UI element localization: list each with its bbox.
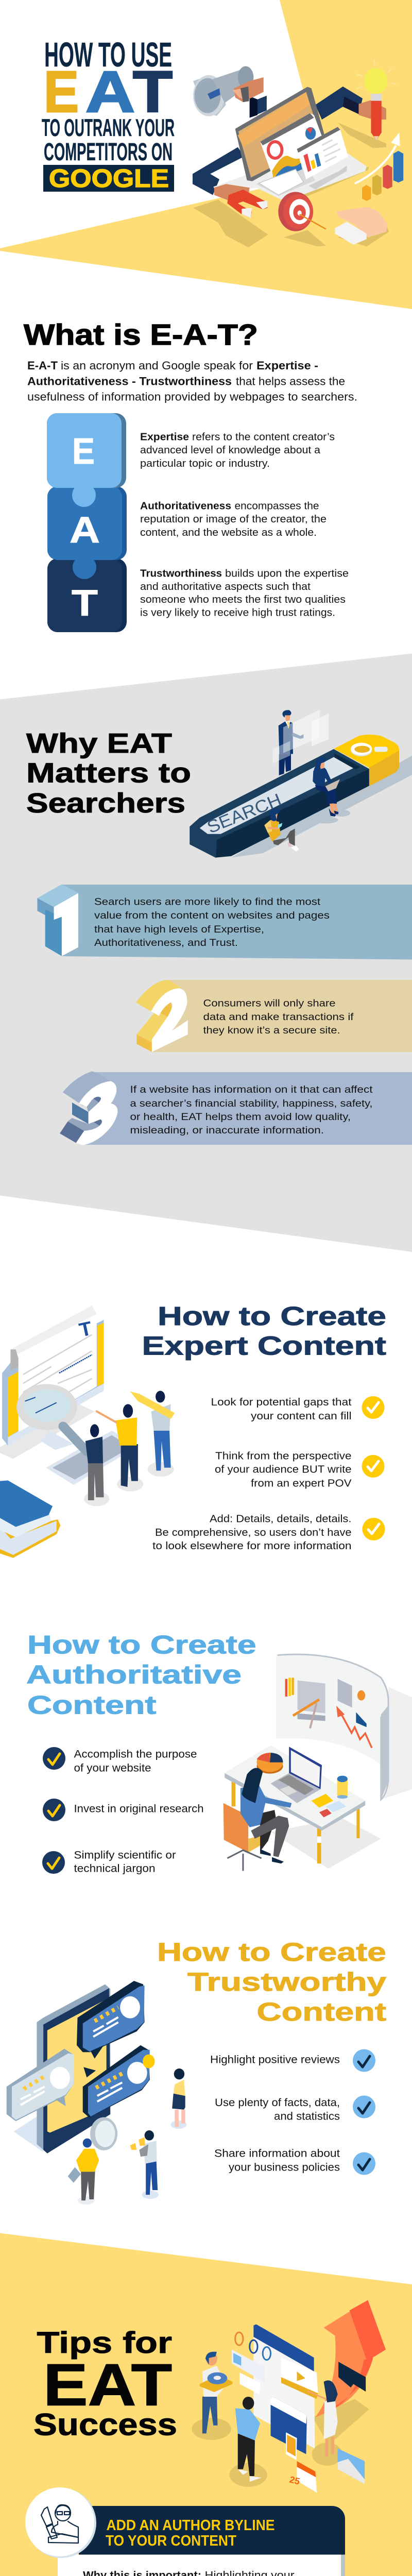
text: Trustworthiness xyxy=(140,568,349,618)
text: Authoritativeness xyxy=(140,501,327,538)
intro paragraph: that helps assess the xyxy=(236,375,345,387)
title xyxy=(42,36,175,193)
list: authoritative content tips xyxy=(74,1749,204,1874)
heading: How to Create Expert Content xyxy=(142,1301,386,1360)
list: expert content tips: from an expert POV xyxy=(251,1478,352,1489)
text: reason 2: data and make transactions if xyxy=(203,1012,354,1023)
panel: why EAT matters background xyxy=(0,653,412,1252)
text: Trustworthiness: someone who meets the first two qualities xyxy=(140,594,346,605)
intro paragraph: Authoritativeness - Trustworthiness xyxy=(27,375,232,387)
text: Trustworthiness: is very likely to receive high trust ratings. xyxy=(140,607,335,618)
heading: How to Create Authoritative Content: Authoritative xyxy=(26,1660,242,1689)
label: calendar date: 25 xyxy=(288,2474,301,2487)
list: trustworthy content tips: and statistics xyxy=(274,2110,340,2123)
text: Expertise: particular topic or industry. xyxy=(140,458,270,469)
illustration: search bar with people xyxy=(190,709,412,858)
text: reason 3: or health, EAT helps them avoid low quality, xyxy=(130,1112,351,1123)
list: expert content tips: your content can fill xyxy=(251,1411,351,1422)
text: reason 1: that have high levels of Expertise, xyxy=(94,924,264,935)
text: Trustworthiness: Trustworthiness xyxy=(140,568,222,579)
illustration: search bar with people: SEARCH xyxy=(204,790,284,837)
heading: How to Create Trustworthy Content: How to Create xyxy=(157,1938,386,1967)
icon: author with pen xyxy=(25,2487,96,2558)
heading: Why EAT Matters to Searchers: Searchers xyxy=(26,788,185,819)
intro paragraph: E-A-T xyxy=(27,359,58,372)
list: trustworthy content tips: Use plenty of facts, data, xyxy=(215,2097,340,2109)
heading: Why EAT Matters to Searchers: Matters to xyxy=(26,757,191,788)
heading: Why EAT Matters to Searchers xyxy=(26,728,191,819)
icon: number 2 xyxy=(136,980,188,1052)
illustration: monitor, magnifier and team xyxy=(0,1306,175,1558)
heading: How to Create Expert Content: Expert Content xyxy=(142,1331,386,1360)
text: reason 1 xyxy=(94,896,330,948)
list: authoritative content tips: technical jargon xyxy=(74,1863,156,1874)
icons: navy check marks xyxy=(42,1747,65,1874)
text: Trustworthiness: builds upon the expertise xyxy=(225,568,349,579)
heading: Why EAT Matters to Searchers: Why EAT xyxy=(26,728,172,759)
list: trustworthy content tips: your business policies xyxy=(229,2162,340,2173)
text: Authoritativeness: content, and the website as a whole. xyxy=(140,527,317,538)
panel: reason 1 xyxy=(37,884,412,959)
heading: What is E-A-T?: What is E-A-T? xyxy=(24,318,258,351)
card: add an author byline: TO YOUR CONTENT xyxy=(106,2533,236,2549)
list: expert content tips: Think from the perspective xyxy=(215,1451,351,1462)
E-A-T puzzle blocks xyxy=(47,413,127,632)
icon: number 3 xyxy=(60,1071,117,1145)
intro paragraph: Expertise - xyxy=(256,359,318,372)
text: reason 1: Authoritativeness, and Trust. xyxy=(94,938,238,948)
title: T xyxy=(133,59,173,124)
icon: number 1 xyxy=(37,884,78,956)
intro paragraph xyxy=(27,359,357,403)
title: E xyxy=(44,59,79,124)
heading: Tips for EAT Success: Tips for xyxy=(37,2326,172,2360)
title: TO OUTRANK YOUR xyxy=(42,114,175,141)
illustration: woman at desk with charts xyxy=(224,1654,412,1871)
list: authoritative content tips: Simplify scientific or xyxy=(74,1850,176,1861)
illustration: team building a web page with rising arrow xyxy=(192,2300,386,2493)
heading: How to Create Authoritative Content: Content xyxy=(27,1691,157,1720)
text: Expertise: refers to the content creator’s xyxy=(192,432,335,443)
text: Expertise: advanced level of knowledge about a xyxy=(140,445,321,456)
panel: reason 2 xyxy=(136,980,412,1052)
list: expert content tips: Look for potential gaps that xyxy=(211,1397,352,1408)
text: reason 1: value from the content on websites and pages xyxy=(94,910,330,921)
list: expert content tips xyxy=(152,1397,352,1552)
list: authoritative content tips: Accomplish the purpose xyxy=(74,1749,197,1760)
heading: How to Create Trustworthy Content: Trustworthy xyxy=(187,1968,386,1996)
title: GOOGLE xyxy=(49,165,169,193)
text: reason 2: they know it’s a secure site. xyxy=(203,1025,340,1036)
text: reason 2 xyxy=(203,998,354,1036)
card: add an author byline: ADD AN AUTHOR BYLINE xyxy=(106,2517,275,2534)
icons: blue check marks xyxy=(353,2049,375,2175)
heading: How to Create Authoritative Content xyxy=(26,1630,256,1720)
illustration: monitor, magnifier and team: T xyxy=(77,1318,94,1342)
text: Authoritativeness: reputation or image of the creator, the xyxy=(140,514,327,525)
E-A-T puzzle blocks: E xyxy=(72,431,95,472)
text: reason 1: Search users are more likely to find the most xyxy=(94,896,321,908)
title: COMPETITORS ON xyxy=(44,139,173,166)
list: trustworthy content tips xyxy=(210,2054,340,2173)
list: expert content tips: of your audience BUT write xyxy=(215,1464,351,1476)
text: Authoritativeness: Authoritativeness xyxy=(140,501,231,512)
heading: Tips for EAT Success xyxy=(33,2326,177,2442)
text: Trustworthiness: and authoritative aspects such that xyxy=(140,581,311,592)
icons: yellow check marks xyxy=(362,1396,385,1540)
text: reason 3: misleading, or inaccurate information. xyxy=(130,1125,324,1136)
list: authoritative content tips: Invest in original research xyxy=(74,1803,204,1815)
heading: Tips for EAT Success: Success xyxy=(33,2407,177,2442)
list: trustworthy content tips: Highlight positive reviews xyxy=(210,2054,340,2066)
list: expert content tips: Add: Details, details, details. xyxy=(210,1514,351,1525)
heading: How to Create Expert Content: How to Create xyxy=(158,1301,386,1331)
text: reason 3 xyxy=(130,1084,373,1136)
intro paragraph: is an acronym and Google speak for xyxy=(61,359,253,372)
list: expert content tips: Be comprehensive, so users don’t have xyxy=(155,1527,351,1538)
text: reason 2: Consumers will only share xyxy=(203,998,336,1009)
heading: Tips for EAT Success: EAT xyxy=(43,2352,172,2418)
list: trustworthy content tips: Share information about xyxy=(214,2147,340,2160)
heading: How to Create Authoritative Content: How to Create xyxy=(27,1630,256,1659)
panel: reason 3 xyxy=(60,1071,412,1145)
hero illustration: laptop, megaphone, charts and target xyxy=(193,60,403,247)
E-A-T puzzle blocks: T xyxy=(72,583,98,624)
title: HOW TO USE xyxy=(44,36,172,74)
illustration: phone with reviews xyxy=(7,1981,186,2205)
intro paragraph: usefulness of information provided by webpages to searchers. xyxy=(27,391,357,403)
list: authoritative content tips: of your website xyxy=(74,1762,151,1774)
text: Expertise xyxy=(140,432,335,469)
text: Expertise: Expertise xyxy=(140,432,189,443)
E-A-T puzzle blocks: A xyxy=(70,510,100,551)
text: Authoritativeness: encompasses the xyxy=(235,501,319,512)
heading: How to Create Trustworthy Content xyxy=(157,1938,386,2026)
panel: tips yellow background xyxy=(0,2233,412,2576)
list: expert content tips: to look elsewhere for more information xyxy=(152,1540,351,1552)
text: reason 3: a searcher’s financial stability, happiness, safety, xyxy=(130,1098,373,1109)
title: A xyxy=(85,59,135,124)
card: add an author byline xyxy=(25,2487,345,2576)
text: reason 3: If a website has information on it that can affect xyxy=(130,1084,373,1095)
heading: How to Create Trustworthy Content: Content xyxy=(256,1997,386,2026)
hero yellow background xyxy=(0,0,412,309)
